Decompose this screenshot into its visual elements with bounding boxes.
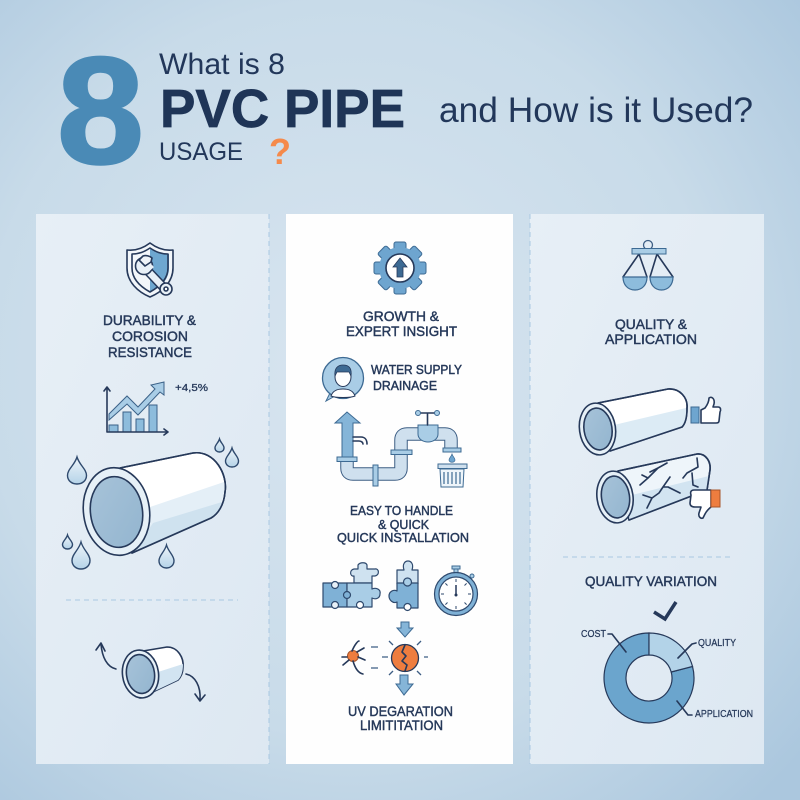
heading: easy to handle quick installation: QUICK INSTALLATION — [337, 530, 469, 545]
text: water supply drainage: DRAINAGE — [373, 379, 437, 393]
icon: balance scales — [623, 240, 673, 290]
illustration: plumbing with faucet and basket — [335, 410, 467, 487]
illustration: good pipe with thumbs up — [576, 389, 721, 457]
title block — [57, 26, 753, 196]
orange question mark: ? — [269, 131, 291, 172]
heading: growth and expert insight: GROWTH & — [363, 308, 440, 324]
title line: and How is it Used?: and How is it Used? — [439, 91, 753, 130]
big number 8: 8 — [57, 26, 144, 196]
heading: quality and application: APPLICATION — [605, 331, 697, 347]
heading: easy to handle quick installation — [337, 503, 469, 545]
icon: expert avatar speech bubble — [322, 358, 364, 401]
illustration: small pipe with rotation arrows — [96, 643, 205, 701]
heading: quality and application: QUALITY & — [615, 316, 688, 332]
arrow: down from UV sun — [396, 675, 413, 695]
heading: UV degradation limitation — [348, 703, 453, 733]
heading: durability and corrosion resistance — [103, 312, 197, 360]
icon: stopwatch — [434, 566, 478, 616]
heading: easy to handle quick installation: & QUICK — [378, 517, 429, 532]
chart: donut of cost, quality, application — [581, 629, 753, 723]
panel: growth and installation — [286, 214, 513, 764]
icon: check mark — [654, 602, 676, 619]
heading: easy to handle quick installation: EASY TO HANDLE — [350, 503, 453, 518]
label: cost: COST — [581, 629, 606, 640]
heading: UV degradation limitation: LIMITITATION — [360, 717, 443, 733]
panel: quality and application — [530, 214, 764, 764]
icon: shield with wrench — [127, 243, 173, 297]
title line: USAGE: USAGE — [159, 138, 243, 166]
panel: durability — [36, 214, 269, 764]
label: +4,5%: +4,5% — [175, 382, 208, 394]
icon: two-part puzzle column — [389, 561, 418, 610]
heading: durability and corrosion resistance: RESISTANCE — [108, 344, 192, 360]
heading: durability and corrosion resistance: DURABILITY & — [103, 312, 197, 328]
icon: interlocked puzzle pieces — [323, 563, 380, 608]
illustration: cracked pipe with thumbs down — [594, 454, 720, 525]
icon: gear with up arrow — [374, 242, 426, 294]
heading: growth and expert insight: EXPERT INSIGHT — [346, 323, 457, 339]
text: water supply drainage — [371, 363, 463, 393]
heading: growth and expert insight — [346, 308, 457, 339]
text: water supply drainage: WATER SUPPLY — [371, 363, 463, 377]
heading: quality variation: QUALITY VARIATION — [585, 573, 717, 589]
label: quality: QUALITY — [698, 638, 736, 649]
chart: rising bars with arrow — [104, 382, 168, 435]
heading: durability and corrosion resistance: COROSION — [112, 328, 188, 344]
illustration: large pipe with water drops — [62, 439, 238, 569]
arrow: down into UV sun — [397, 622, 413, 637]
title line: PVC PIPE: PVC PIPE — [160, 79, 405, 139]
icon: UV sun and cracked surface — [342, 641, 428, 675]
title line: What is 8: What is 8 — [159, 48, 285, 81]
label: application: APPLICATION — [695, 709, 753, 720]
heading: UV degradation limitation: UV DEGARATION — [348, 703, 453, 719]
heading: quality and application — [605, 316, 697, 347]
